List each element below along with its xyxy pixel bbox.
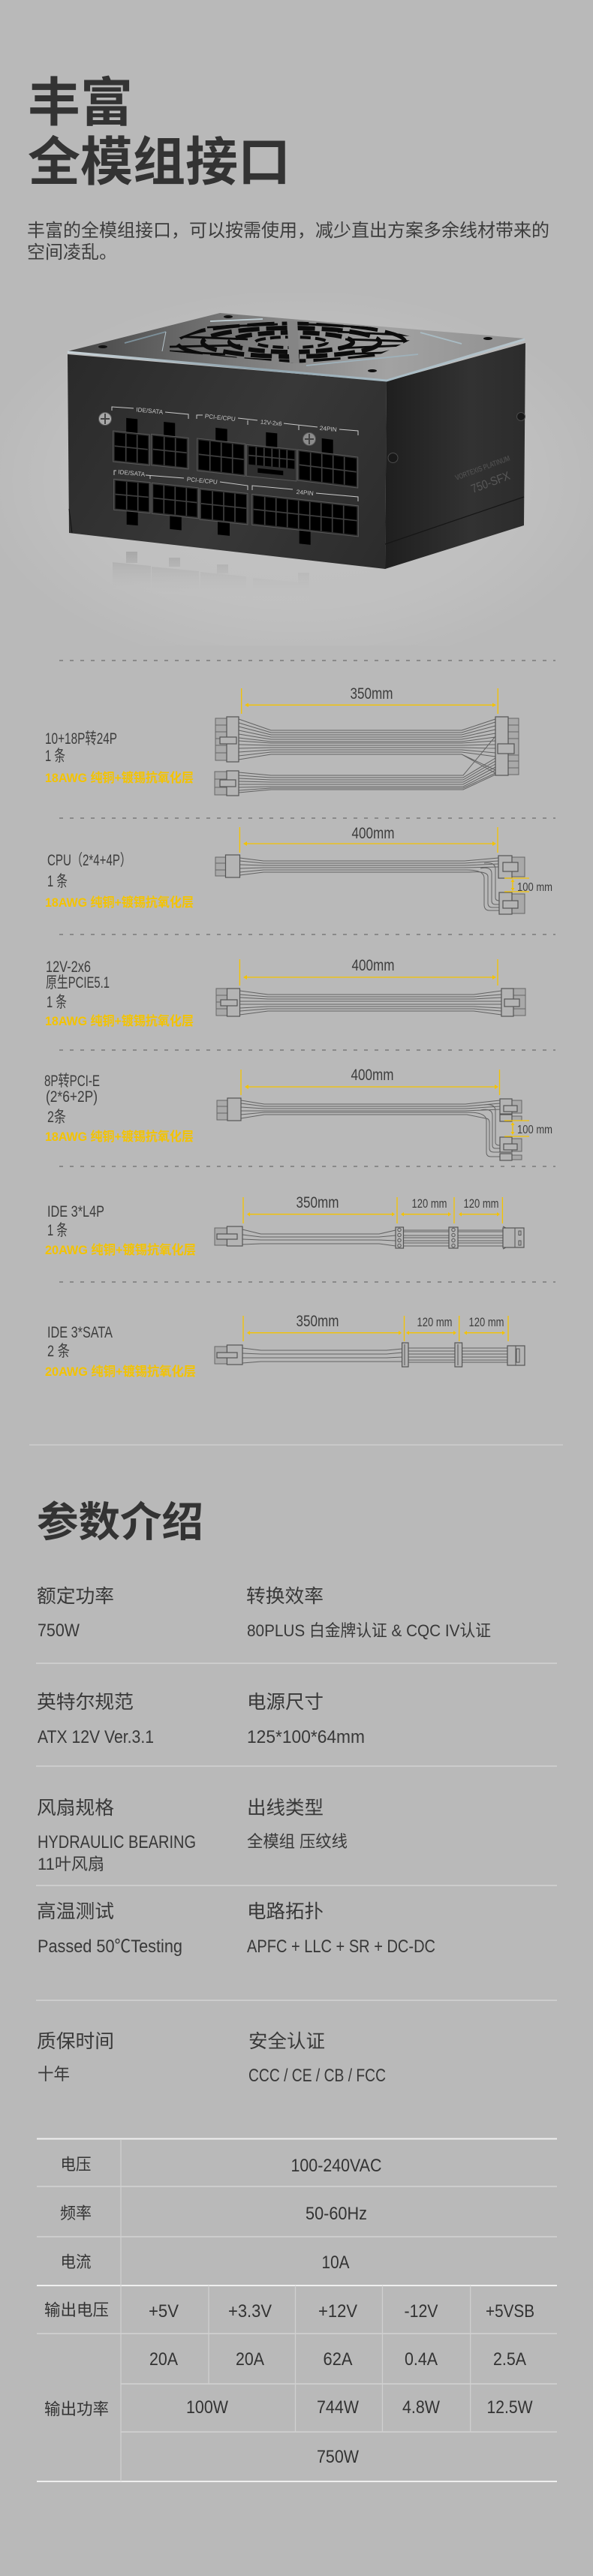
input values: 10A <box>321 2252 350 2273</box>
title <box>28 74 290 191</box>
dimension 400mm: 400mm <box>351 1067 393 1084</box>
port label brackets <box>112 407 358 501</box>
dimensions: 120 mm <box>468 1315 504 1329</box>
output power values: 750W <box>317 2447 359 2467</box>
connector left <box>215 1226 242 1246</box>
sata inline 1 <box>402 1343 408 1367</box>
rated power: 额定功率 <box>37 1586 114 1607</box>
label: IDE 3*L4P <box>47 1203 104 1220</box>
topology: 电路拓扑 <box>247 1901 324 1922</box>
connector row 2 <box>114 479 150 527</box>
input values: 50-60Hz <box>306 2204 367 2224</box>
molex end <box>503 1226 524 1249</box>
output power values: 100W <box>186 2397 228 2418</box>
label: 1 条 <box>47 994 67 1011</box>
label: 原生PCIE5.1 <box>46 974 110 992</box>
temp test <box>37 1901 182 1957</box>
plate screw holes <box>98 315 492 372</box>
wires <box>242 1229 503 1246</box>
dimension 400mm <box>239 825 498 853</box>
intro text: 丰富的全模组接口，可以按需使用，减少直出方案多余线材带来的 <box>27 221 549 241</box>
output current values: 20A <box>236 2349 264 2370</box>
connector left bottom <box>215 771 239 796</box>
title: 丰富 <box>28 74 133 132</box>
screws <box>99 413 525 462</box>
dimension 100 mm <box>504 878 552 894</box>
dimensions: 350mm <box>296 1194 339 1211</box>
fan <box>37 1798 196 1873</box>
input values <box>291 2156 381 2273</box>
label: 1 条 <box>47 1222 68 1239</box>
size: 125*100*64mm <box>247 1727 365 1747</box>
port labels <box>118 406 337 497</box>
intel spec: 英特尔规范 <box>37 1692 134 1713</box>
rated power <box>37 1586 114 1641</box>
label: 8P转PCI-E <box>44 1073 100 1090</box>
fan grille <box>170 321 410 363</box>
label: 18AWG 纯铜+镀锡抗氧化层 <box>45 895 194 910</box>
output current values <box>149 2349 526 2370</box>
topology: APFC + LLC + SR + DC-DC <box>247 1937 435 1957</box>
label: 18AWG 纯铜+镀锡抗氧化层 <box>45 770 194 785</box>
wires <box>242 1348 507 1363</box>
label <box>45 1203 196 1257</box>
side face <box>385 343 525 569</box>
fan: 风扇规格 <box>37 1798 114 1819</box>
wires <box>240 991 501 1015</box>
efficiency <box>246 1586 491 1640</box>
dimension 100 mm: 100 mm <box>517 881 552 894</box>
port labels: IDE/SATA <box>136 406 164 416</box>
spec rows <box>36 1586 557 2086</box>
connector row 1 <box>113 417 149 465</box>
label: 20AWG 纯铜+镀锡抗氧化层 <box>45 1364 196 1379</box>
label <box>45 1324 196 1379</box>
reflection <box>113 552 309 605</box>
label <box>45 852 194 910</box>
fan: 11叶风扇 <box>38 1855 104 1873</box>
label: 18AWG 纯铜+镀锡抗氧化层 <box>45 1013 194 1028</box>
front face <box>68 354 387 569</box>
label: (2*6+2P) <box>46 1088 98 1106</box>
intel spec <box>37 1692 154 1747</box>
label <box>44 1073 194 1144</box>
dimension 100 mm <box>504 1121 552 1136</box>
port labels: PCI-E/CPU <box>204 413 236 423</box>
label: 12V-2x6 <box>46 958 91 976</box>
cable row 5: IDE 3*L4P <box>45 1194 524 1257</box>
cable type <box>247 1798 348 1851</box>
output voltage values: +3.3V <box>228 2301 272 2322</box>
connector left <box>216 989 240 1016</box>
size <box>247 1692 365 1747</box>
heading: specifications: 参数介绍 <box>37 1499 203 1545</box>
cable row 1: 10+18P to 24P <box>45 685 519 796</box>
output current values: 2.5A <box>493 2349 526 2370</box>
dimensions <box>243 1313 508 1341</box>
cable type: 全模组 压纹线 <box>247 1832 348 1851</box>
dimension 400mm <box>239 957 498 986</box>
row labels <box>44 2156 109 2418</box>
cable type: 出线类型 <box>247 1798 324 1819</box>
certification: 安全认证 <box>248 2031 325 2052</box>
connector left top <box>215 717 239 762</box>
warranty: 十年 <box>38 2065 70 2084</box>
port labels: PCI-E/CPU <box>186 476 218 486</box>
top plate <box>68 313 525 381</box>
label: 1 条 <box>45 748 65 765</box>
dimension 350mm: 350mm <box>350 685 393 703</box>
connector right top <box>498 856 525 878</box>
output voltage values: +5VSB <box>486 2301 534 2322</box>
port labels: IDE/SATA <box>118 468 146 478</box>
connector right <box>495 717 519 775</box>
intro text <box>27 221 549 263</box>
port labels: 12V-2x6 <box>260 419 283 427</box>
certification <box>248 2031 386 2086</box>
table lines <box>37 2139 557 2481</box>
warranty <box>37 2031 114 2084</box>
input values: 100-240VAC <box>291 2156 381 2176</box>
molex inline 2 <box>449 1227 458 1248</box>
dimensions: 350mm <box>296 1313 339 1330</box>
wires <box>240 858 499 910</box>
cable row 2: CPU <box>45 825 552 914</box>
side branding: VORTEXIS PLATINUM <box>454 455 511 483</box>
label: 2 条 <box>47 1343 70 1360</box>
output power values: 4.8W <box>402 2397 440 2418</box>
row labels: 输出电压 <box>44 2301 109 2319</box>
connector right bottom <box>500 1137 522 1160</box>
output current values: 62A <box>323 2349 353 2370</box>
sata inline 2 <box>455 1343 462 1367</box>
dimension 350mm <box>242 685 498 714</box>
label: 2条 <box>47 1109 66 1126</box>
product: power supply <box>68 313 525 571</box>
output power values: 12.5W <box>486 2397 533 2418</box>
cable row 3: 12V-2x6 <box>45 957 525 1028</box>
intel spec: ATX 12V Ver.3.1 <box>38 1727 154 1747</box>
port labels: 24PIN <box>319 425 337 433</box>
dimension 100 mm: 100 mm <box>517 1124 552 1136</box>
product glow <box>0 293 593 646</box>
label <box>45 958 194 1028</box>
output voltage values <box>149 2301 534 2322</box>
port labels: 24PIN <box>296 489 314 497</box>
certification: CCC / CE / CB / FCC <box>248 2066 386 2086</box>
connector left <box>215 1345 242 1365</box>
output voltage values: -12V <box>404 2301 438 2322</box>
intro text: 空间凌乱。 <box>27 242 117 263</box>
title: 全模组接口 <box>28 133 290 191</box>
dimensions: 120 mm <box>417 1315 452 1329</box>
connector right <box>501 989 525 1016</box>
output voltage values: +12V <box>318 2301 357 2322</box>
dimensions <box>243 1194 502 1223</box>
output current values: 0.4A <box>405 2349 438 2370</box>
sata end <box>507 1346 525 1365</box>
connector left <box>217 1098 241 1121</box>
wires <box>239 719 495 793</box>
efficiency: 转换效率 <box>246 1586 324 1607</box>
side branding <box>454 455 512 496</box>
connector left <box>215 855 240 877</box>
dimension 400mm: 400mm <box>351 825 395 842</box>
dimension 400mm <box>241 1067 500 1095</box>
row labels: 电流 <box>60 2253 92 2271</box>
fan: HYDRAULIC BEARING <box>38 1832 196 1852</box>
row labels: 电压 <box>60 2156 92 2174</box>
dashed dividers <box>59 661 555 1282</box>
rated power: 750W <box>38 1621 80 1641</box>
electrical table <box>37 2139 557 2481</box>
label: IDE 3*SATA <box>47 1324 113 1341</box>
label: 18AWG 纯铜+镀锡抗氧化层 <box>45 1129 194 1144</box>
molex inline 1 <box>396 1227 404 1248</box>
output voltage values: +5V <box>149 2301 179 2322</box>
row labels: 输出功率 <box>44 2400 109 2418</box>
dimension 400mm: 400mm <box>351 957 395 974</box>
connector right bottom <box>499 892 525 914</box>
plate highlights <box>125 319 462 366</box>
output power values <box>186 2397 533 2467</box>
row labels: 频率 <box>60 2204 92 2222</box>
wires <box>241 1100 500 1157</box>
label: 20AWG 纯铜+镀锡抗氧化层 <box>45 1242 196 1257</box>
connector right top <box>500 1099 522 1121</box>
label <box>45 730 194 785</box>
label: CPU（2*4+4P） <box>47 852 131 869</box>
output current values: 20A <box>149 2349 178 2370</box>
label: 10+18P转24P <box>45 730 117 748</box>
side branding: 750-SFX <box>469 470 512 496</box>
temp test: 高温测试 <box>37 1901 114 1922</box>
cable row 4: 8P to PCI-E <box>44 1067 552 1160</box>
topology <box>247 1901 435 1957</box>
efficiency: 80PLUS 白金牌认证 & CQC IV认证 <box>247 1621 491 1640</box>
section divider <box>29 1444 563 1446</box>
size: 电源尺寸 <box>247 1692 324 1713</box>
cable row 6: IDE 3*SATA <box>45 1313 525 1379</box>
dimensions: 120 mm <box>411 1196 447 1211</box>
output power values: 744W <box>317 2397 359 2418</box>
label: 1 条 <box>47 873 68 890</box>
warranty: 质保时间 <box>37 2031 114 2052</box>
temp test: Passed 50℃Testing <box>38 1937 182 1957</box>
plate lip <box>68 339 525 381</box>
dimensions: 120 mm <box>464 1196 498 1211</box>
